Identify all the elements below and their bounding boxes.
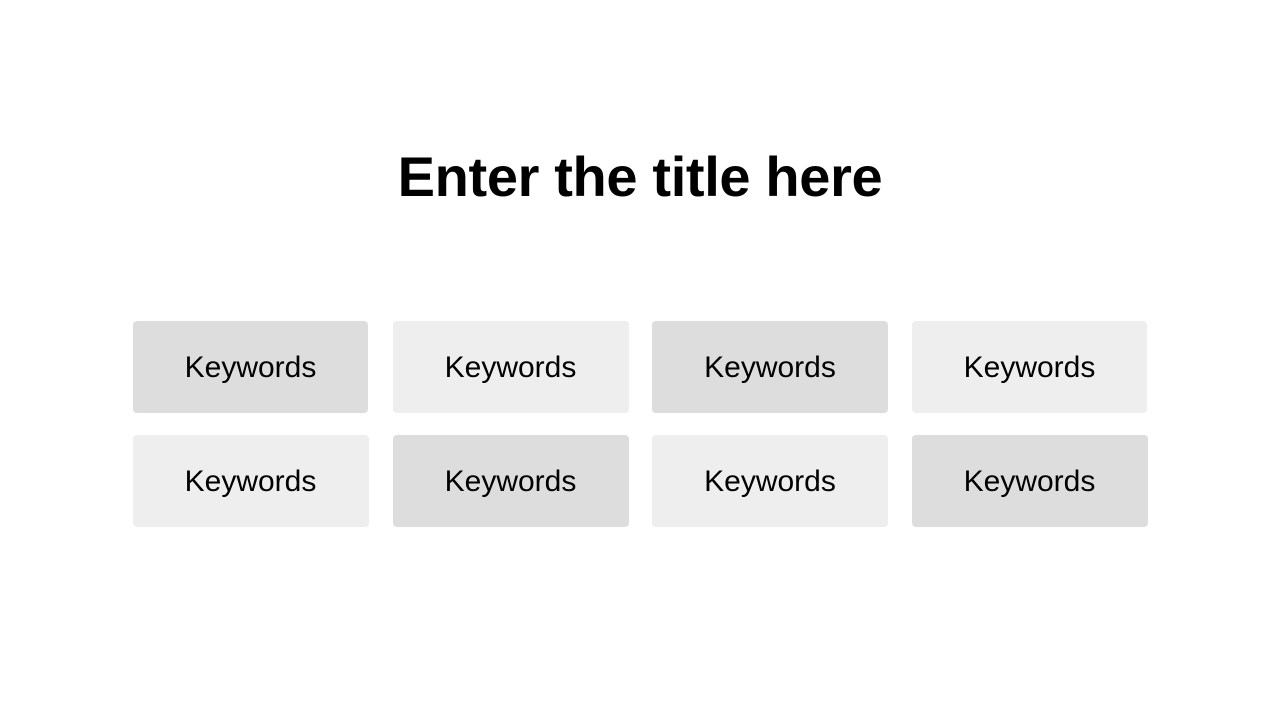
keyword card row 1 col 1: Keywords [185,351,316,384]
keyword card row 2 col 4: Keywords [964,465,1095,498]
keyword card row 2 col 2: Keywords [445,465,576,498]
keyword card row 1 col 4 [912,321,1147,412]
keyword card row 2 col 1: Keywords [185,465,316,498]
keyword card row 2 col 3 [652,435,888,526]
keyword card row 1 col 2 [393,321,629,412]
keyword card row 1 col 4: Keywords [964,351,1095,384]
keyword card row 1 col 3: Keywords [704,351,836,384]
keyword card row 2 col 3: Keywords [704,465,836,498]
keyword card row 1 col 2: Keywords [445,351,576,384]
keyword card row 1 col 1 [133,321,368,412]
keyword card row 2 col 4 [912,435,1148,526]
keyword card row 1 col 3 [652,321,888,412]
keyword card row 2 col 1 [133,435,369,526]
keyword card row 2 col 2 [393,435,629,526]
title: Enter the title here [398,145,882,208]
keyword grid [133,321,1148,527]
